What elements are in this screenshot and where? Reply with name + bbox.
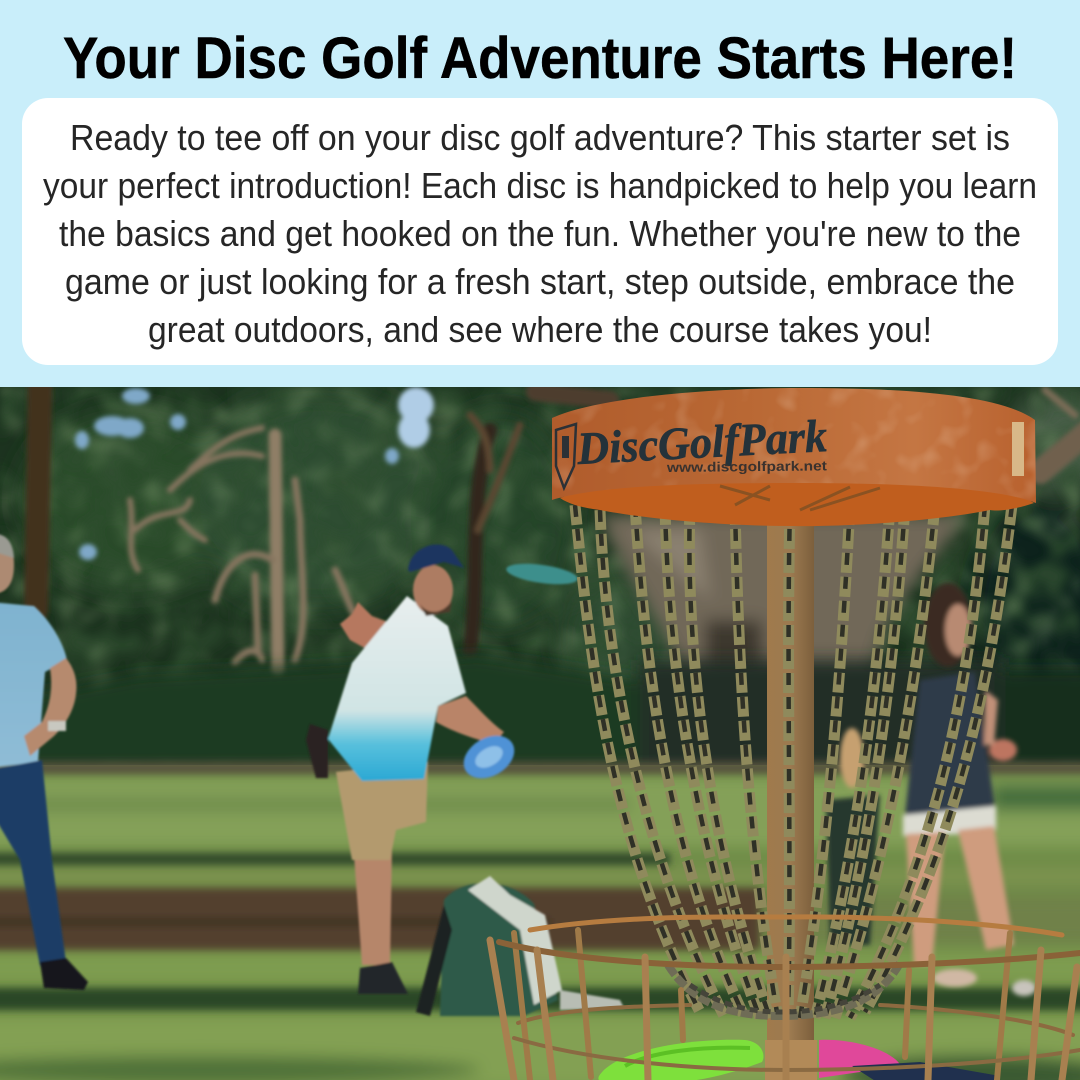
arm bbox=[24, 658, 77, 756]
woman hair and face bbox=[924, 583, 972, 667]
discs in basket bbox=[598, 1040, 1000, 1080]
grass field bbox=[0, 762, 1080, 1080]
sky spots bbox=[75, 387, 434, 560]
intro paragraph: great outdoors, and see where the course takes you! bbox=[148, 309, 932, 350]
pink disc bbox=[819, 1040, 902, 1078]
band logo shield bbox=[556, 424, 576, 488]
header background bbox=[0, 0, 1080, 387]
band brand text: DiscGolfPark bbox=[575, 410, 828, 474]
trees background bbox=[0, 387, 1080, 787]
intro paragraph: Ready to tee off on your disc golf adventure? This starter set is bbox=[70, 117, 1010, 158]
back uprights bbox=[514, 930, 1010, 1080]
head bbox=[0, 535, 14, 594]
chain bowl bbox=[668, 963, 900, 1016]
head and cap bbox=[413, 565, 453, 615]
hedge bbox=[0, 655, 1080, 770]
front rings bbox=[499, 942, 1080, 967]
rim bbox=[552, 388, 1036, 503]
intro paragraph: game or just looking for a fresh start, step outside, embrace the bbox=[65, 261, 1015, 302]
shirt bbox=[328, 596, 466, 781]
shoe bbox=[40, 958, 88, 990]
title: Your Disc Golf Adventure Starts Here! bbox=[63, 26, 1017, 91]
big trunk behind basket bbox=[600, 515, 965, 850]
legs bbox=[354, 850, 392, 965]
tee bbox=[0, 602, 67, 768]
intro text panel bbox=[22, 98, 1058, 365]
photo: disc golf scene bbox=[0, 387, 1080, 1080]
thrower bbox=[306, 544, 522, 994]
basket cage bbox=[490, 917, 1080, 1080]
band tag bbox=[1012, 422, 1024, 476]
disc in hand bbox=[456, 727, 522, 787]
basket pole bbox=[765, 515, 817, 1080]
tree trunks and branches bbox=[36, 387, 1080, 670]
arms bbox=[340, 602, 404, 652]
flying disc bbox=[505, 560, 579, 588]
front uprights bbox=[490, 940, 1077, 1080]
spectator left bbox=[0, 534, 88, 990]
basket top band bbox=[552, 388, 1036, 526]
intro paragraph bbox=[43, 117, 1037, 350]
band url text: www.discgolfpark.net bbox=[666, 458, 828, 475]
blue disc bbox=[852, 1062, 1000, 1080]
basket chains bbox=[575, 505, 1012, 1018]
backpack bbox=[416, 876, 624, 1016]
woman and child behind the basket bbox=[826, 583, 1036, 996]
green disc bbox=[598, 1040, 763, 1080]
intro paragraph: the basics and get hooked on the fun. Whether you're new to the bbox=[59, 213, 1021, 254]
back rings bbox=[530, 917, 1062, 935]
intro paragraph: your perfect introduction! Each disc is handpicked to help you learn bbox=[43, 165, 1037, 206]
shoes bbox=[933, 969, 977, 987]
underside bbox=[560, 483, 1034, 526]
child bbox=[840, 728, 864, 788]
jeans bbox=[0, 760, 66, 966]
top, shorts, legs bbox=[905, 672, 995, 815]
bag-side shadow bbox=[306, 724, 328, 778]
